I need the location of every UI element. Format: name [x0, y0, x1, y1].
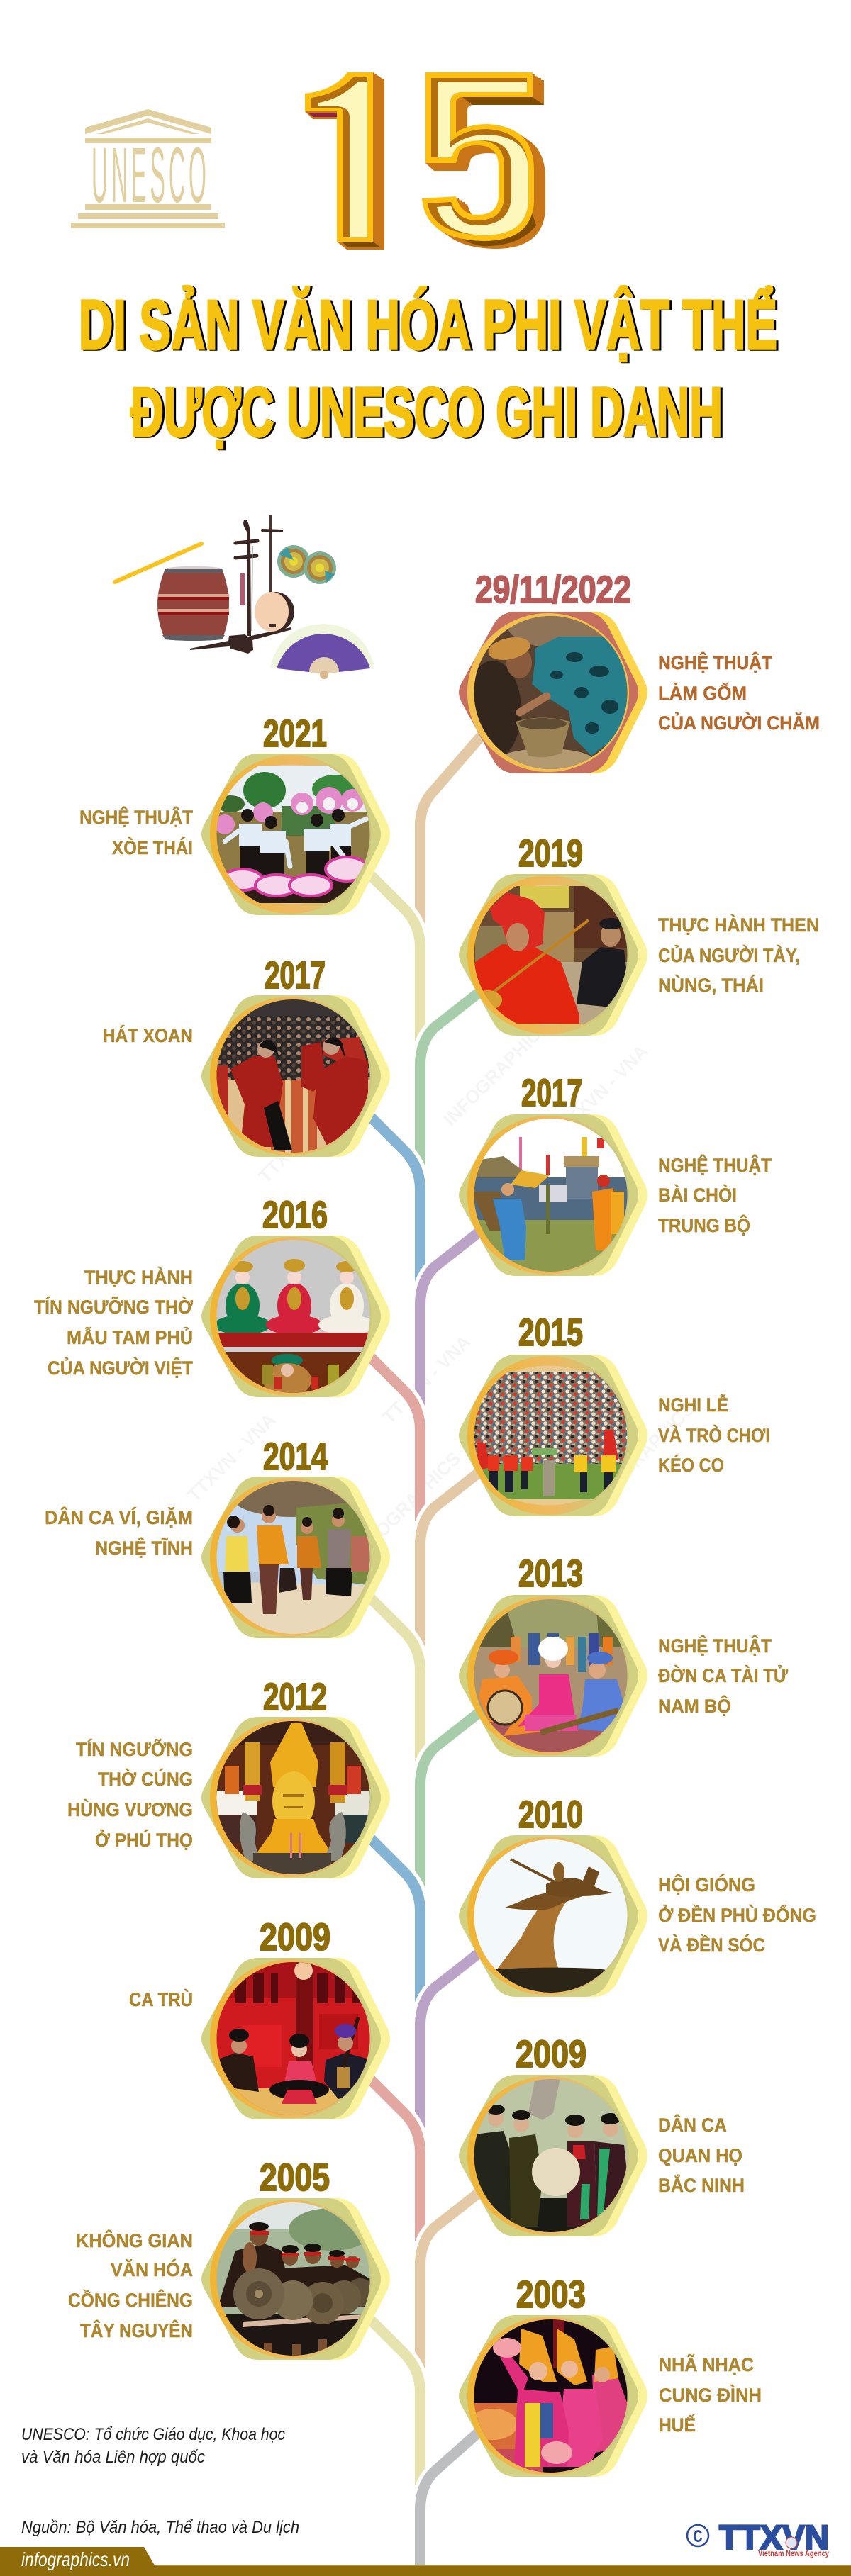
caption — [34, 1266, 193, 1379]
caption: CUNG ĐÌNH — [659, 2384, 762, 2406]
footer band — [0, 2547, 851, 2576]
caption: CỦA NGƯỜI CHĂM — [658, 711, 820, 734]
year: 2017 — [265, 954, 326, 997]
photo: Ca tru — [201, 1958, 390, 2119]
caption: BÀI CHÒI — [658, 1184, 737, 1206]
caption: LÀM GỐM — [658, 681, 747, 704]
heritage: 2015 tug of war — [459, 1311, 770, 1516]
caption: BẮC NINH — [658, 2174, 745, 2196]
year: 2009 — [516, 2033, 586, 2076]
heritage: 2019 Then — [459, 832, 819, 1036]
connector: 2016 stem — [362, 1348, 420, 1538]
website: infographics.vn — [21, 2548, 130, 2570]
heritage: 2009 Ca tru — [129, 1916, 390, 2119]
caption: NGHỆ TĨNH — [95, 1537, 193, 1559]
caption — [658, 1394, 770, 1476]
connector: 2017 left stem — [362, 1108, 420, 1297]
photo: xoe dance — [201, 754, 390, 915]
caption — [659, 2353, 762, 2436]
connector: 2012 stem — [362, 1830, 420, 2020]
year: 2014 — [263, 1435, 328, 1478]
caption: CA TRÙ — [129, 1988, 193, 2010]
watermarks — [183, 1015, 699, 1562]
year: 2019 — [518, 832, 583, 875]
caption: NHÃ NHẠC — [659, 2353, 754, 2375]
watermarks: INFOGRAPHICS — [439, 1015, 554, 1130]
caption: Ở ĐỀN PHÙ ĐỔNG — [658, 1903, 816, 1926]
heritage: 2016 Mother Goddess — [34, 1194, 390, 1397]
heritage: 2012 Hung Kings — [67, 1676, 390, 1878]
caption — [658, 1635, 789, 1717]
year: 2003 — [516, 2273, 586, 2316]
photo: Then practice — [459, 874, 647, 1036]
year: 2013 — [518, 1552, 583, 1595]
connector: 2010 stem — [420, 1949, 484, 2141]
caption: VÀ ĐỀN SÓC — [658, 1934, 765, 1956]
caption: HỘI GIÓNG — [658, 1874, 755, 1895]
watermarks: INFOGRAPHICS — [350, 1447, 465, 1562]
year: 2017 — [521, 1072, 582, 1114]
caption: NGHỆ THUẬT — [658, 1154, 772, 1176]
connector: 2003 stem — [420, 2428, 484, 2567]
year: 2015 — [518, 1311, 583, 1354]
caption — [658, 2114, 745, 2196]
logo: TTXVN: Vietnam News Agency — [758, 2548, 829, 2558]
caption: TÍN NGƯỠNG THỜ — [34, 1296, 193, 1318]
caption: KÉO CO — [658, 1454, 724, 1476]
year: 2009 — [260, 1916, 330, 1959]
logo: TTXVN: TTXVN — [719, 2519, 829, 2557]
caption: HUẾ — [659, 2414, 696, 2436]
photo: Central Highlands gongs — [201, 2198, 390, 2360]
connector: 2009 right stem — [420, 2189, 484, 2382]
connector: 2022 stem — [420, 727, 489, 936]
heritage: 2003 Nha nhac — [459, 2273, 762, 2477]
caption: MẪU TAM PHỦ — [67, 1326, 193, 1348]
year 29/11/2022: 29/11/2022 — [475, 569, 631, 611]
connector: 2015 stem — [420, 1469, 484, 1659]
big number 15 drawn as gold extruded figures — [305, 72, 545, 250]
caption: TÍN NGƯỠNG — [76, 1738, 193, 1760]
caption: NGHỆ THUẬT — [79, 806, 193, 828]
caption — [68, 2229, 193, 2341]
caption — [658, 914, 819, 996]
caption — [67, 1738, 193, 1851]
caption: NÙNG, THÁI — [658, 974, 764, 996]
caption: Ở PHÚ THỌ — [95, 1828, 193, 1851]
connector: 2005 stem — [362, 2311, 420, 2499]
caption: VÀ TRÒ CHƠI — [658, 1424, 770, 1446]
icon: UNESCO temple logo — [71, 109, 225, 228]
caption: XÒE THÁI — [112, 836, 193, 858]
caption — [79, 806, 193, 858]
heritage: 2010 Giong festival — [459, 1793, 816, 1997]
photo: Vi Giam singers — [201, 1477, 390, 1638]
heritage: 2017 Xoan — [103, 954, 390, 1157]
logo: TTXVN: C — [694, 2527, 702, 2546]
caption: CỦA NGƯỜI TÀY, — [658, 943, 800, 966]
caption: QUAN HỌ — [658, 2145, 742, 2166]
photo: Quan ho singers — [459, 2075, 647, 2236]
caption: NGHI LỄ — [658, 1394, 728, 1416]
photo: Cham pottery — [459, 600, 647, 773]
heritage: 2009 Quan ho — [459, 2033, 745, 2236]
caption — [658, 1154, 772, 1236]
caption: THỰC HÀNH THEN — [658, 914, 819, 936]
connector: 2009 left stem — [362, 2071, 420, 2261]
caption: ĐỜN CA TÀI TỬ — [658, 1664, 789, 1686]
watermarks: TTXVN - VNA — [555, 1040, 652, 1137]
caption: VĂN HÓA — [111, 2258, 193, 2280]
note: UNESCO definition — [21, 2425, 285, 2467]
year: 2012 — [263, 1676, 327, 1718]
watermarks: TTXVN - VNA — [378, 1331, 475, 1428]
year: 2021 — [263, 712, 327, 755]
photo: Xoan singing — [201, 995, 390, 1157]
caption: TRUNG BỘ — [658, 1214, 750, 1236]
connector: 2021 stem — [362, 866, 420, 1056]
heritage: 2013 Don ca tai tu — [459, 1552, 789, 1757]
note: UNESCO definition: UNESCO: Tổ chức Giáo dục, Khoa học — [21, 2425, 285, 2444]
caption: THỜ CÚNG — [98, 1768, 193, 1790]
caption: NAM BỘ — [658, 1695, 731, 1717]
caption: DÂN CA VÍ, GIẶM — [45, 1506, 193, 1528]
caption — [658, 651, 820, 734]
heritage: 2021 Thai xoe — [79, 712, 390, 915]
note: UNESCO definition: và Văn hóa Liên hợp quốc — [21, 2448, 205, 2467]
year: 2010 — [518, 1793, 583, 1836]
connector: 2019 stem — [420, 989, 484, 1177]
watermarks: TTXVN - VNA — [183, 1409, 280, 1506]
photo: Don ca tai tu — [459, 1595, 647, 1757]
caption: CỦA NGƯỜI VIỆT — [48, 1356, 193, 1379]
caption: KHÔNG GIAN — [76, 2229, 193, 2251]
heritage: 2017 Bai Choi — [459, 1072, 772, 1276]
icon: traditional instruments — [115, 515, 374, 679]
photo: tug of war — [459, 1355, 647, 1516]
year: 2016 — [262, 1194, 328, 1236]
source: Nguồn: Bộ Văn hóa, Thể thao và Du lịch — [21, 2518, 299, 2537]
year: 2005 — [260, 2156, 330, 2199]
connector: 2014 stem — [362, 1589, 420, 1779]
photo: Hue royal court music — [459, 2315, 647, 2477]
caption: HÙNG VƯƠNG — [67, 1798, 193, 1820]
photo: three goddesses — [201, 1236, 390, 1397]
title — [79, 286, 777, 451]
photo: Hung King statue — [201, 1717, 390, 1878]
caption: CỒNG CHIÊNG — [68, 2289, 193, 2311]
icon: UNESCO temple logo: UNESCO — [91, 132, 210, 219]
caption: THỰC HÀNH — [84, 1266, 193, 1288]
caption: TÂY NGUYÊN — [80, 2319, 193, 2341]
caption — [658, 1874, 816, 1956]
heritage: 2005 gongs — [68, 2156, 390, 2360]
photo: Saint Giong statue — [459, 1835, 647, 1997]
connector: 2017 right stem — [420, 1228, 484, 1418]
caption: DÂN CA — [658, 2114, 727, 2136]
heritage: 2022 pottery — [459, 569, 820, 773]
watermarks: INFOGRAPHICS — [584, 1398, 699, 1513]
caption: NGHỆ THUẬT — [658, 651, 772, 673]
connector: 2013 stem — [420, 1709, 484, 1900]
caption: NGHỆ THUẬT — [658, 1635, 772, 1657]
watermarks: TTXVN - VNA — [254, 1090, 351, 1187]
caption: HÁT XOAN — [103, 1024, 193, 1046]
heritage: 2014 Vi Giam — [45, 1435, 390, 1638]
caption — [45, 1506, 193, 1559]
photo: Bai choi — [459, 1114, 647, 1276]
